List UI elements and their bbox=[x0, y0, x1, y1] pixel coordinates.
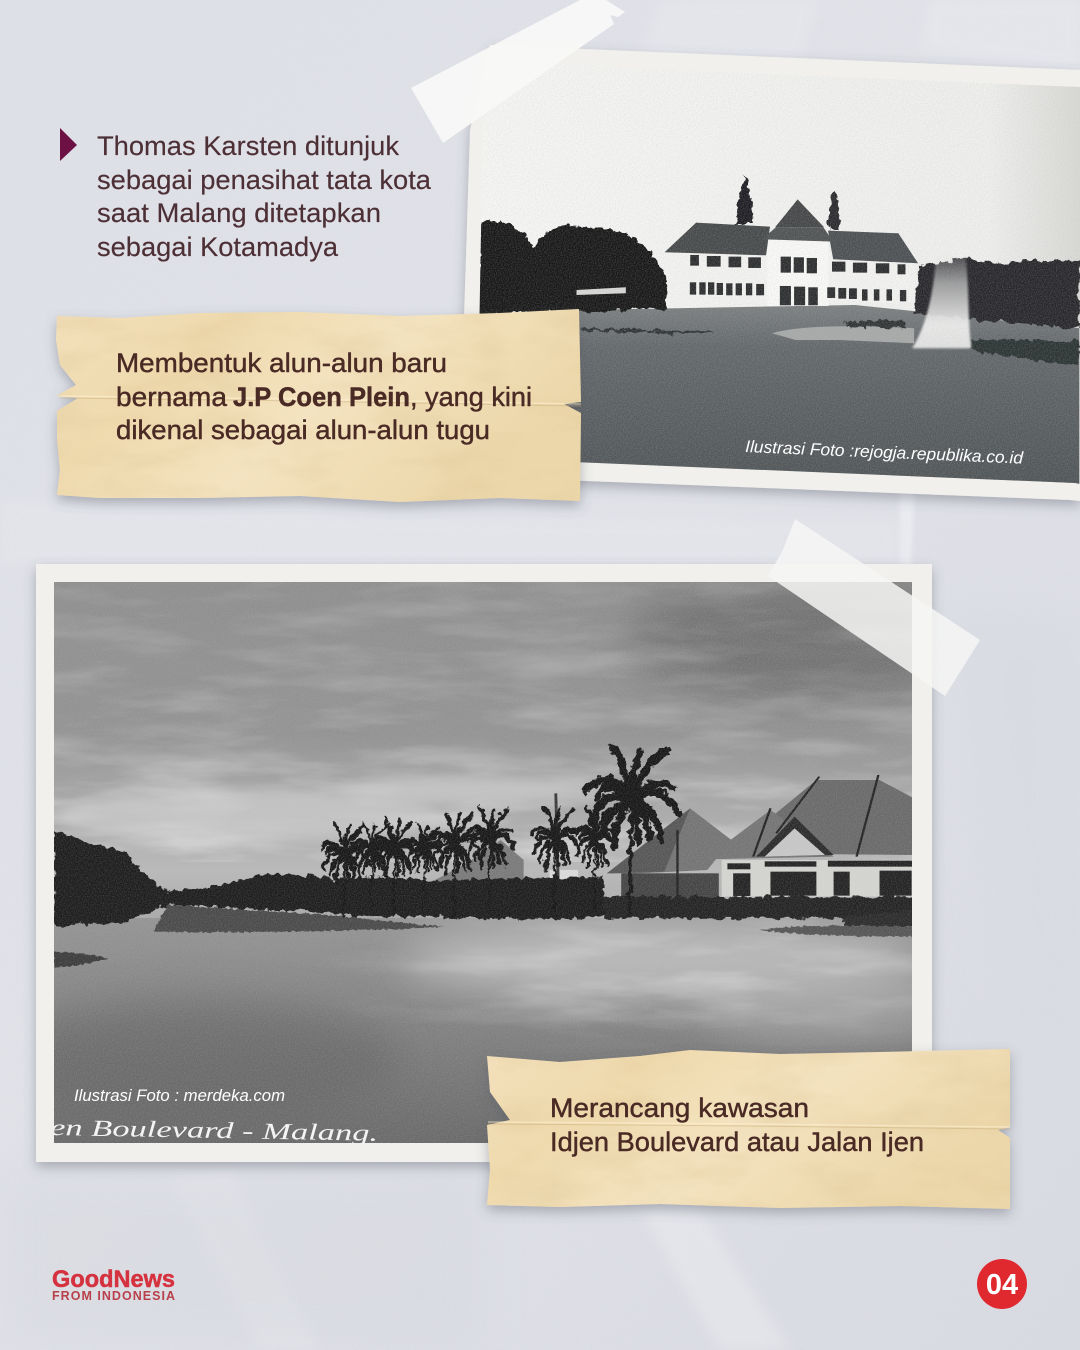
tree line, palms and islands bbox=[54, 747, 914, 927]
icon: maroon triangle bullet bbox=[60, 128, 77, 161]
text block: intro bbox=[97, 131, 432, 262]
upper windows bbox=[690, 255, 906, 305]
panel: bottom photo bbox=[0, 564, 970, 1162]
photo caption: Ilustrasi Foto : merdeka.com bbox=[74, 1087, 285, 1105]
text block: intro: saat Malang ditetapkan bbox=[97, 198, 381, 228]
photo inscription: en Boulevard - Malang. bbox=[50, 1115, 378, 1146]
building walls bbox=[914, 288, 916, 303]
note: alun-alun paper bbox=[50, 305, 590, 505]
note text: , yang kini bbox=[410, 382, 532, 412]
house one roof bbox=[607, 808, 731, 873]
note text: J.P Coen Plein bbox=[233, 382, 410, 412]
logo: GoodNews from Indonesia: FROM INDONESIA bbox=[52, 1289, 175, 1303]
note text bbox=[116, 348, 532, 445]
note text: Merancang kawasan bbox=[550, 1093, 809, 1123]
note text bbox=[550, 1093, 924, 1157]
lower windows bbox=[690, 282, 696, 295]
logo: GoodNews from Indonesia: GoodNews bbox=[52, 1266, 175, 1293]
note text: bernama bbox=[116, 382, 228, 412]
house two gable bbox=[756, 817, 834, 857]
torn paper bbox=[56, 309, 581, 502]
right island bbox=[759, 926, 914, 937]
small house bbox=[432, 840, 524, 883]
photo caption: Ilustrasi Foto :rejogja.republika.co.id bbox=[745, 437, 1024, 468]
note text: Idjen Boulevard atau Jalan Ijen bbox=[550, 1127, 924, 1157]
fountain bbox=[912, 255, 971, 348]
note text: Membentuk alun-alun baru bbox=[116, 348, 447, 378]
tape: top photo bbox=[411, 0, 625, 143]
left island bbox=[54, 952, 109, 968]
torn paper bbox=[487, 1049, 1010, 1209]
house two main roof bbox=[776, 780, 912, 855]
tape: bottom photo bbox=[768, 519, 980, 696]
house two side roof bbox=[704, 810, 834, 859]
text block: intro: sebagai Kotamadya bbox=[97, 232, 339, 262]
photo frame bbox=[459, 45, 1080, 501]
text block: intro: sebagai penasihat tata kota bbox=[97, 165, 432, 195]
text block: intro: Thomas Karsten ditunjuk bbox=[97, 131, 399, 161]
note text: dikenal sebagai alun-alun tugu bbox=[116, 415, 490, 445]
house one wall bbox=[621, 873, 719, 900]
page number badge bbox=[977, 1259, 1027, 1309]
pole bbox=[556, 793, 559, 920]
trees and garden beds bbox=[476, 175, 1079, 365]
photo: building with fountain bbox=[470, 55, 1080, 493]
photo: Idjen Boulevard bbox=[54, 582, 912, 1143]
note: Idjen Boulevard paper bbox=[480, 1045, 1015, 1215]
photo frame bbox=[36, 564, 932, 1162]
page number badge: 04 bbox=[986, 1269, 1018, 1301]
central island bbox=[153, 905, 443, 932]
roofs bbox=[665, 223, 770, 255]
house two wall bbox=[722, 860, 914, 897]
panel: top photo bbox=[459, 45, 1080, 501]
